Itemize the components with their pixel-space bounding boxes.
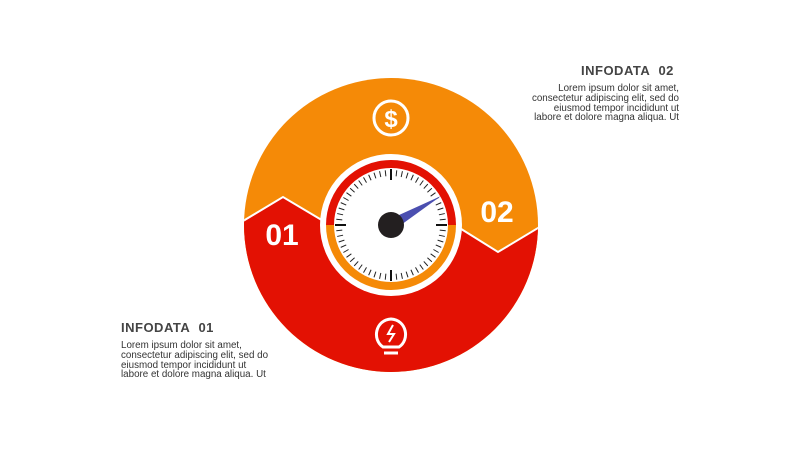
heading: infodata 02: INFODATA 02: [581, 63, 674, 78]
text block: infodata 01: labore et dolore magna aliqua. Ut: [121, 369, 266, 380]
text block: infodata 01: [121, 340, 268, 380]
text block: infodata 02: [532, 83, 679, 123]
text block: infodata 02: Lorem ipsum dolor sit amet,: [558, 83, 679, 94]
panel: orange segment 02: [244, 78, 538, 372]
needle: [388, 196, 441, 230]
text block: infodata 01: Lorem ipsum dolor sit amet,: [121, 340, 242, 351]
chart: circular gauge diagram: [244, 78, 538, 372]
text block: infodata 01: eiusmod tempor incididunt ut: [121, 360, 246, 371]
text block: infodata 02: consectetur adipiscing elit, sed do: [532, 93, 679, 104]
text block: infodata 02: labore et dolore magna aliqua. Ut: [534, 112, 679, 123]
text block: infodata 01: consectetur adipiscing elit, sed do: [121, 350, 268, 361]
icon: dollar: [374, 101, 408, 135]
panel: red segment 01: [244, 196, 538, 372]
label: 01: 01: [265, 219, 299, 252]
gauge: [320, 154, 462, 296]
label: 02: 02: [480, 196, 514, 229]
text block: infodata 02: eiusmod tempor incididunt ut: [554, 103, 679, 114]
heading: infodata 01: INFODATA 01: [121, 320, 214, 335]
icon: dollar: $: [384, 106, 398, 133]
icon: light bulb: [376, 319, 406, 353]
